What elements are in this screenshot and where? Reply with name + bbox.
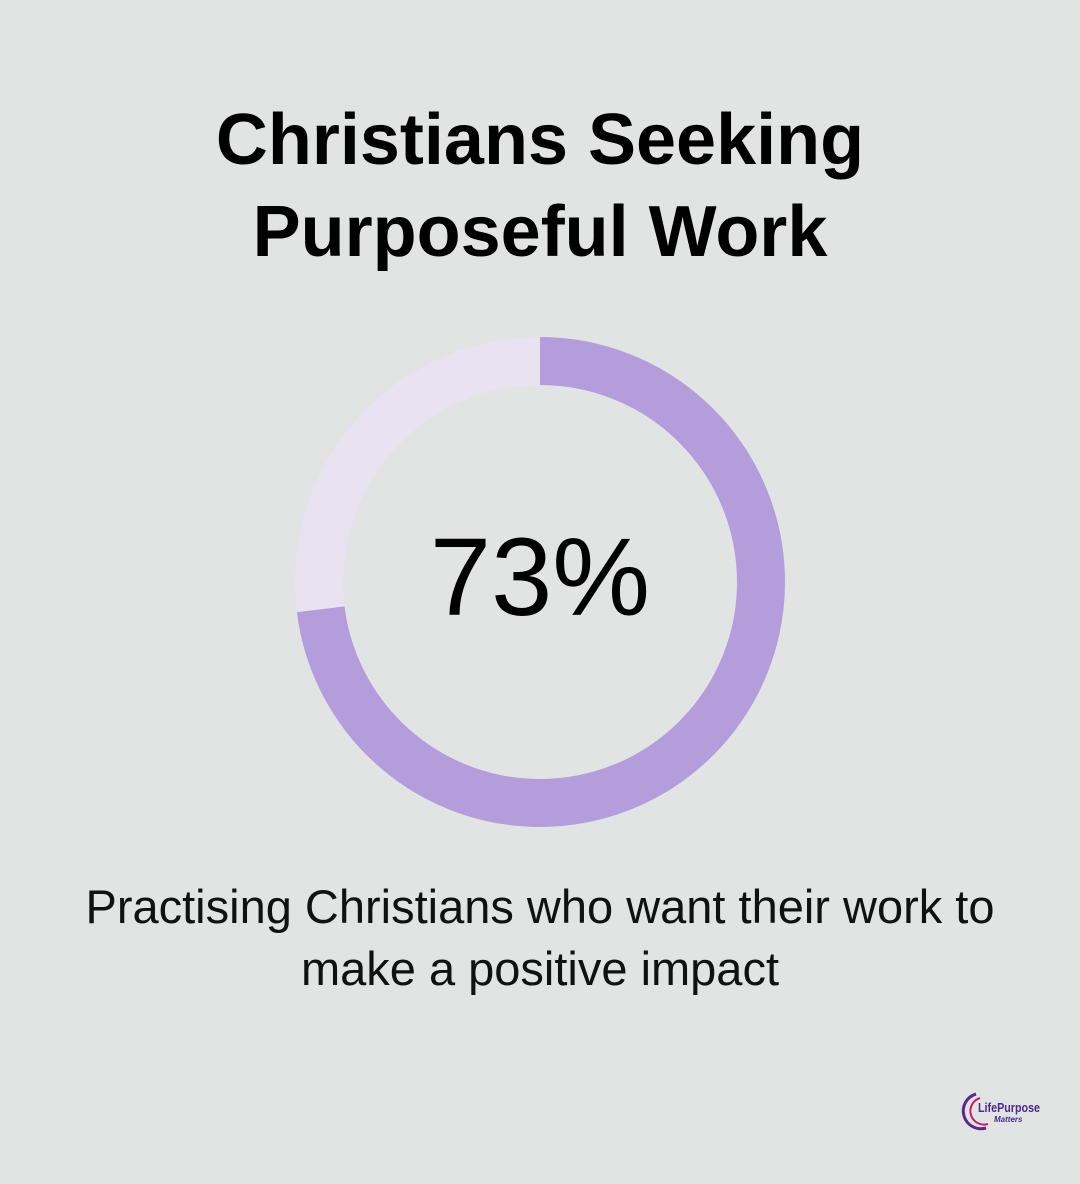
description	[85, 880, 995, 995]
logo	[962, 1092, 1040, 1130]
donut chart: 73%	[430, 516, 650, 639]
description: make a positive impact	[301, 942, 779, 995]
title: Christians Seeking	[216, 100, 864, 180]
title: Purposeful Work	[253, 192, 827, 272]
description: Practising Christians who want their work to	[85, 880, 995, 933]
logo: Matters	[994, 1115, 1023, 1124]
title	[216, 100, 864, 272]
